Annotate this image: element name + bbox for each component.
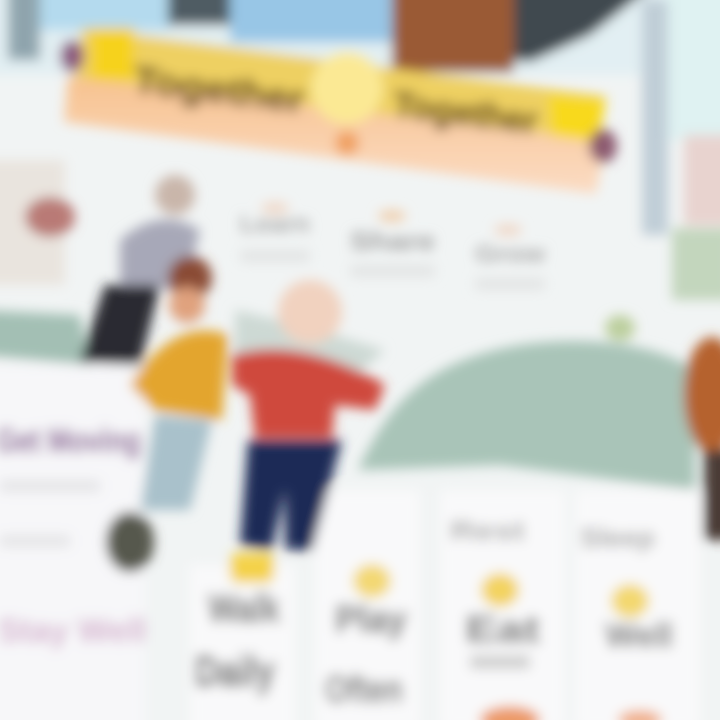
boy in red — [230, 280, 385, 583]
banner ribbon yellow — [76, 28, 606, 140]
banner ribbon peach — [64, 76, 608, 194]
right edge figure — [684, 337, 720, 540]
banner right tab — [548, 95, 606, 142]
card three: Rest — [450, 515, 525, 546]
card four: Well — [605, 617, 673, 655]
card two: Often — [325, 669, 403, 711]
card two: Play — [335, 599, 407, 641]
background adult figure — [80, 175, 200, 365]
card one — [195, 587, 281, 696]
card two — [325, 564, 407, 711]
banner heading right: Together — [391, 83, 540, 142]
card four — [580, 522, 673, 720]
card four: Sleep — [580, 522, 655, 553]
panel subheading: Stay Well — [0, 612, 146, 650]
banner left tab — [92, 28, 134, 80]
banner marker — [335, 131, 359, 155]
panel body lines — [0, 480, 100, 547]
lower cards background — [190, 490, 700, 720]
column one: Learn — [240, 211, 310, 238]
banner heading left: Together — [131, 59, 307, 122]
card one: Walk — [208, 587, 281, 631]
column three: Grow — [475, 241, 545, 268]
card three: Eat — [465, 609, 540, 651]
column two: Share — [350, 226, 435, 256]
building scene at the top — [0, 0, 720, 300]
ribbon end left — [60, 40, 84, 72]
lower cards — [195, 515, 673, 720]
upper info columns — [240, 202, 545, 290]
ribbon end right — [589, 129, 617, 163]
left text panel — [0, 365, 146, 720]
card three — [450, 515, 540, 720]
panel heading: Get Moving — [0, 422, 141, 460]
banner center badge — [311, 52, 383, 124]
child in yellow — [106, 256, 228, 572]
green hills — [0, 310, 695, 490]
panel background — [0, 365, 145, 720]
banner — [60, 28, 617, 194]
card one: Daily — [195, 647, 275, 696]
